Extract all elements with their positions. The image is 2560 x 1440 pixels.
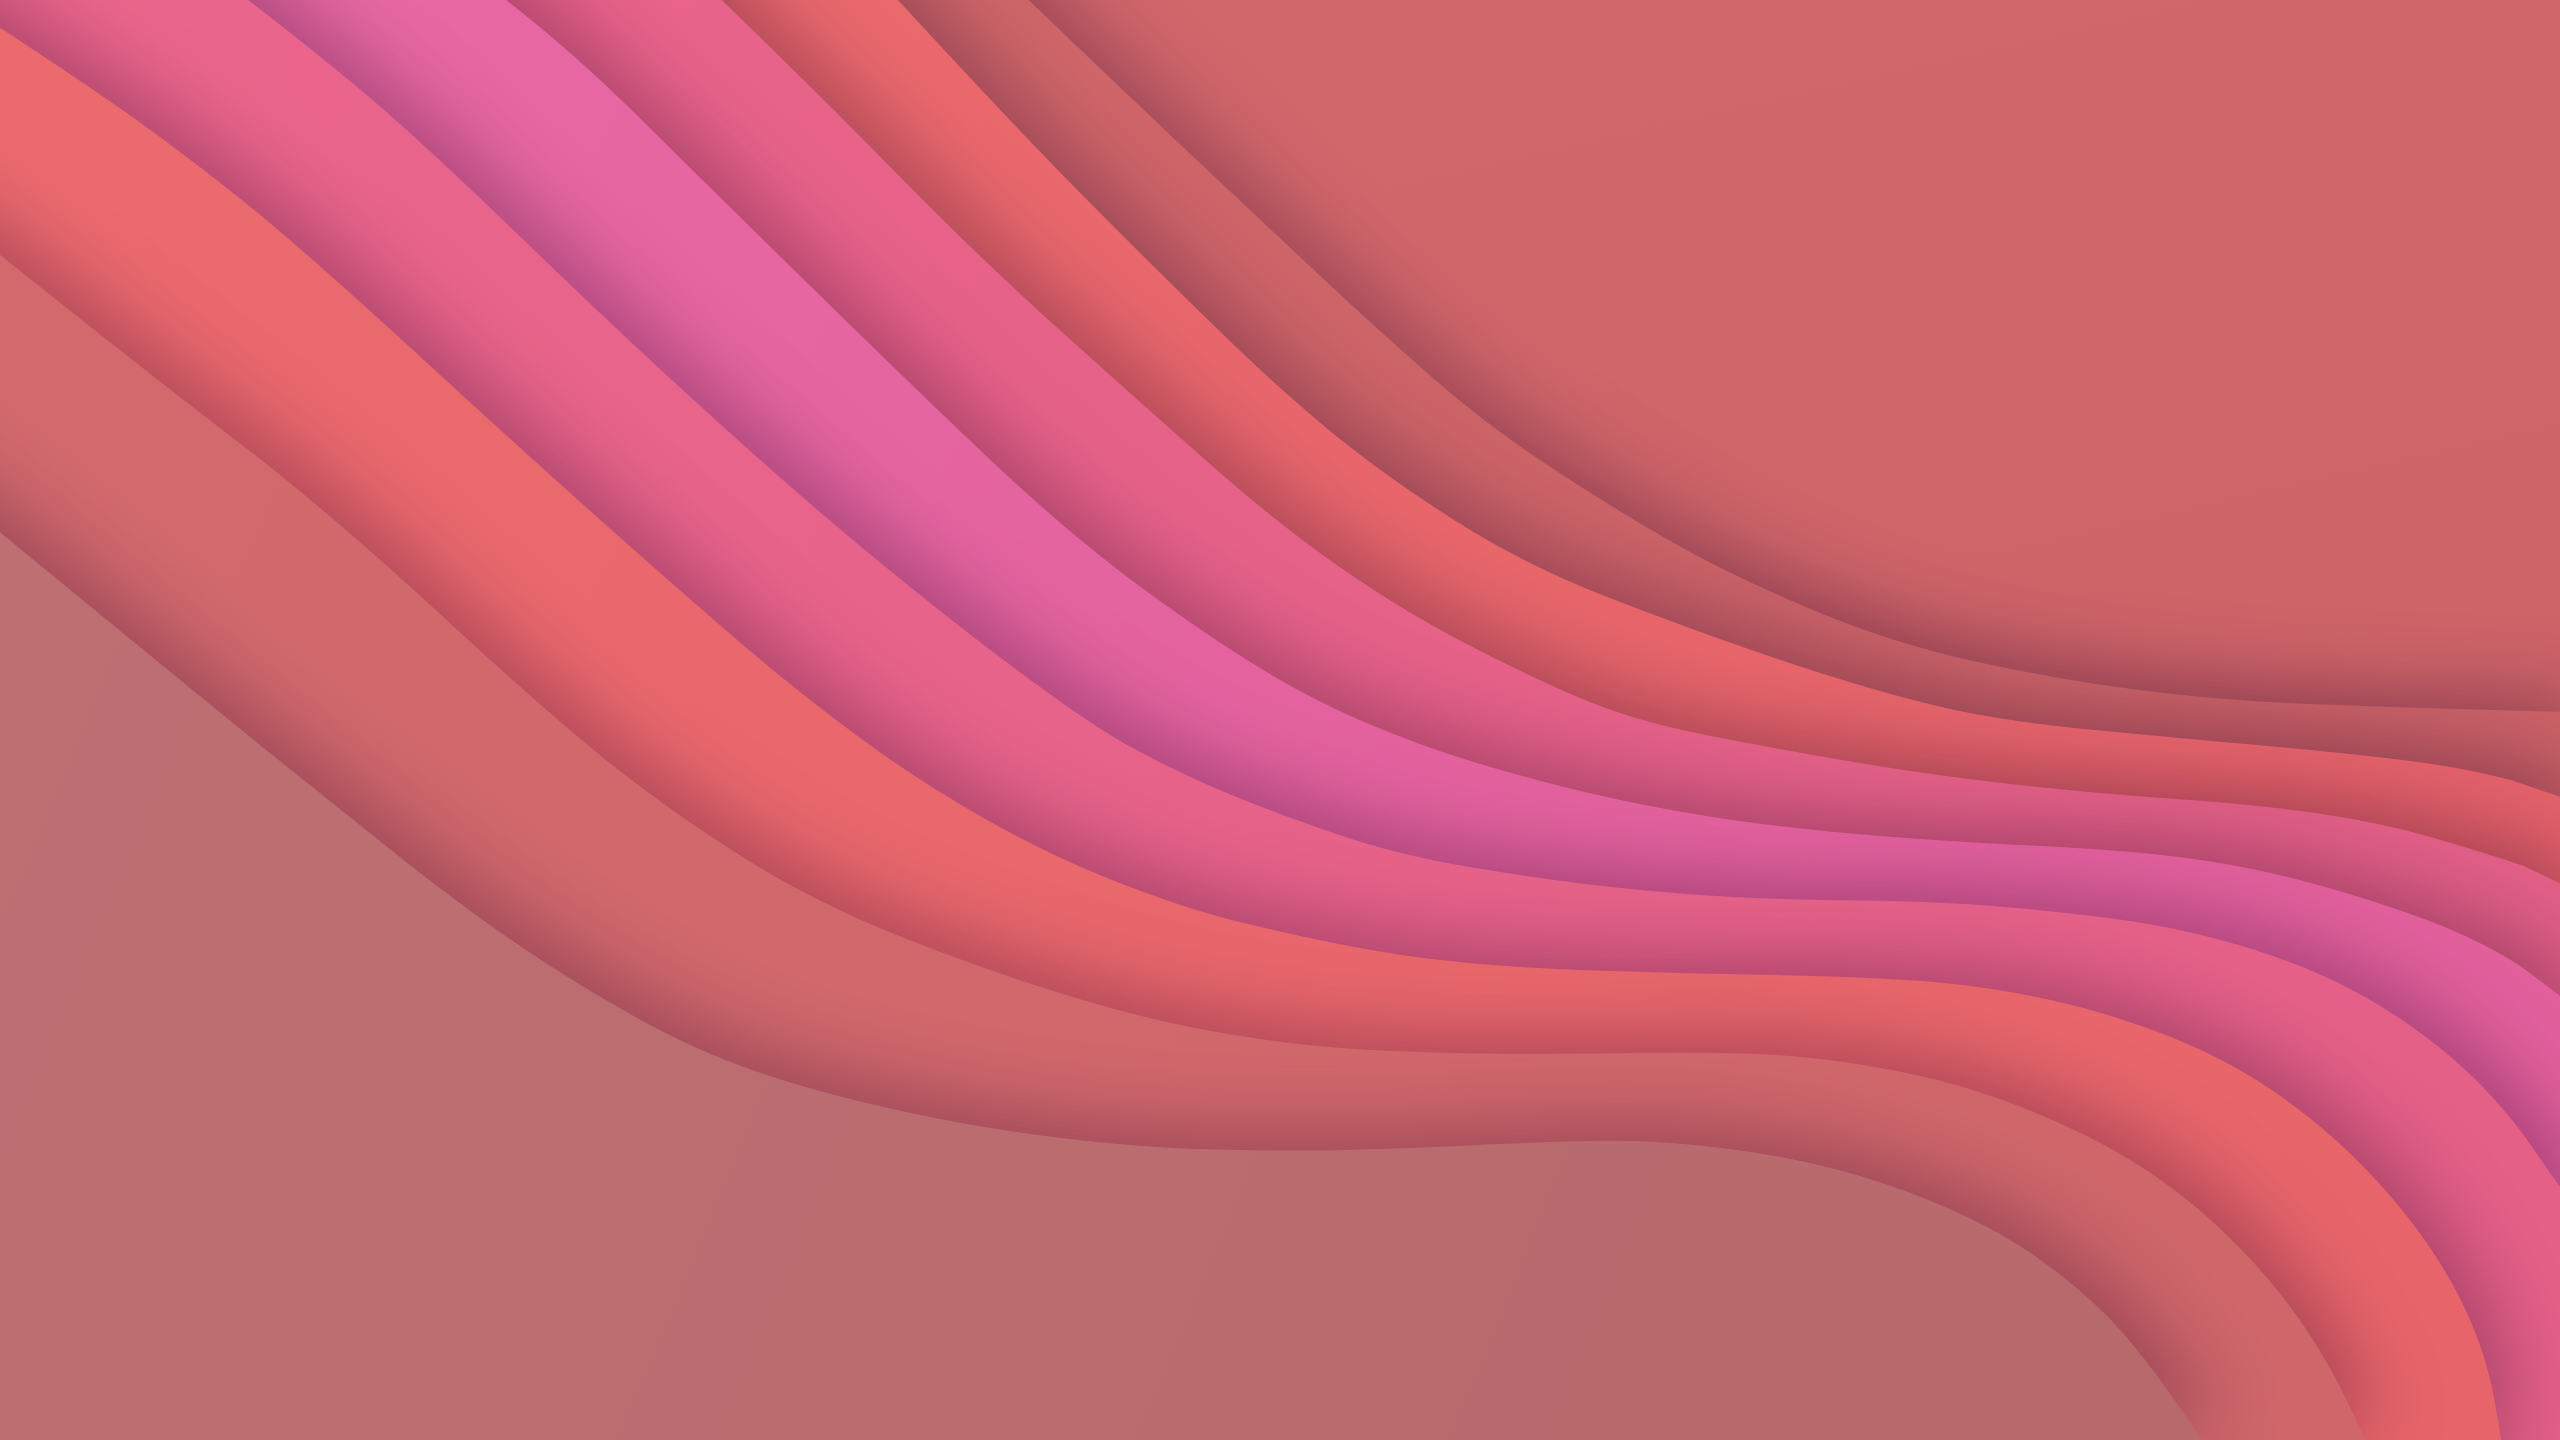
panel: lower left mauve field [0, 457, 2202, 1440]
